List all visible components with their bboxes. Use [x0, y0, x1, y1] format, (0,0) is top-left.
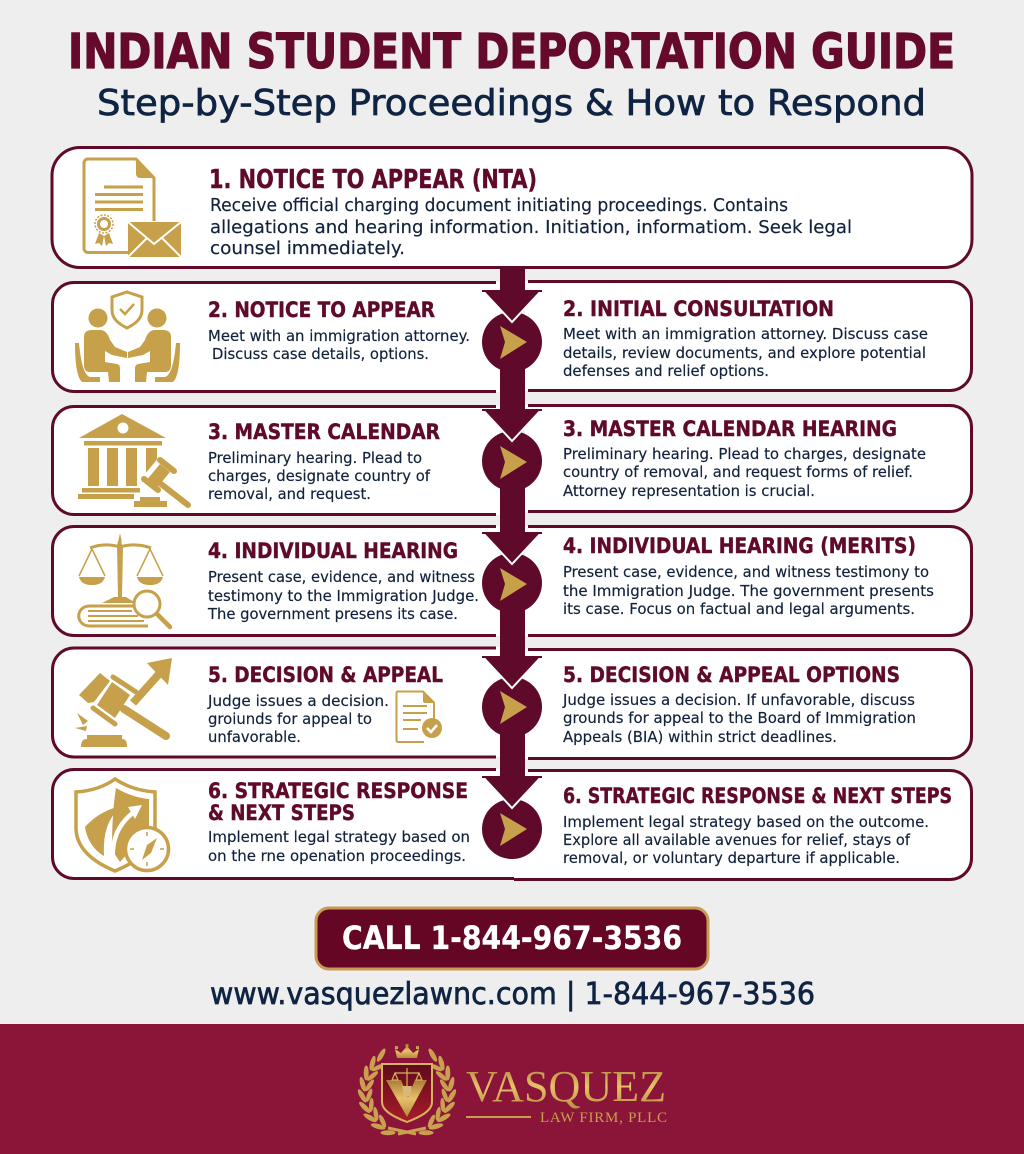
text block: Judge issues a decision.	[207, 692, 389, 710]
text block: on the rne openation proceedings.	[208, 847, 466, 865]
text block: Appeals (BIA) within strict deadlines.	[563, 728, 837, 746]
text block: Discuss case details, options.	[212, 345, 429, 363]
panel: step 2 right	[525, 281, 972, 391]
text block: Attorney representation is crucial.	[563, 482, 815, 500]
heading: 5. DECISION & APPEAL	[208, 663, 443, 688]
text block	[208, 327, 470, 363]
icon: document with seal and envelope	[84, 159, 181, 257]
text block: Explore all available avenues for relief, stays of	[563, 831, 911, 849]
text block: removal, and request.	[208, 485, 371, 503]
wordmark: VASQUEZ	[466, 1062, 666, 1111]
text block: Judge issues a decision. If unfavorable, discuss	[562, 691, 915, 709]
contact line: www.vasquezlawnc.com | 1-844-967-3536	[210, 977, 815, 1012]
icon: shield with road and compass	[76, 779, 170, 872]
step marker 4	[482, 532, 542, 613]
text block: Meet with an immigration attorney. Discuss case	[563, 325, 928, 343]
text block	[207, 692, 389, 746]
panel: step 6 right	[514, 770, 972, 880]
text block: The government presens its case.	[207, 605, 458, 623]
text block	[563, 445, 926, 500]
step marker 3	[482, 409, 542, 491]
step marker 2	[482, 290, 542, 372]
text block: unfavorable.	[208, 728, 301, 746]
icon: scales, book and magnifier	[79, 533, 170, 627]
panel: step 1 notice to appear	[52, 148, 972, 268]
icon: laurel wreath	[356, 1047, 458, 1135]
heading: 1. NOTICE TO APPEAR (NTA)	[209, 165, 537, 195]
step marker 5	[482, 656, 542, 737]
text block	[562, 691, 916, 746]
text block	[563, 325, 928, 380]
icon: two people meeting with shield	[75, 292, 180, 382]
panel: step 6 left	[52, 769, 515, 879]
step marker 6	[482, 776, 542, 859]
divider	[466, 1116, 531, 1118]
panel: step 4 left	[52, 526, 500, 636]
text block	[208, 449, 431, 503]
call button: CALL 1-844-967-3536	[342, 919, 682, 957]
panel: step 5 right	[525, 649, 972, 759]
call button	[316, 908, 708, 969]
icon: courthouse and gavel	[78, 414, 188, 507]
firm suffix: LAW FIRM, PLLC	[540, 1110, 667, 1126]
icon: crown	[395, 1044, 419, 1058]
text block: Present case, evidence, and witness testimony to	[563, 563, 929, 581]
heading: 3. MASTER CALENDAR HEARING	[563, 417, 897, 442]
text block: Present case, evidence, and witness	[208, 568, 475, 586]
text block: charges, designate country of	[208, 467, 431, 485]
heading: 3. MASTER CALENDAR	[208, 420, 440, 445]
text block: Preliminary hearing. Plead to charges, designate	[563, 445, 926, 463]
heading: 4. INDIVIDUAL HEARING (MERITS)	[563, 534, 916, 559]
text block: Receive official charging document initiating proceedings. Contains	[210, 195, 788, 216]
text block	[208, 828, 470, 865]
subtitle: Step-by-Step Proceedings & How to Respond	[97, 83, 926, 124]
text block: testimony to the Immigration Judge.	[208, 587, 479, 605]
heading	[208, 779, 468, 826]
icon: shield with V	[382, 1064, 432, 1122]
heading: 2. INITIAL CONSULTATION	[563, 297, 834, 322]
text block: removal, or voluntary departure if applicable.	[563, 849, 900, 867]
panel: step 4 right	[525, 526, 972, 636]
icon: gavel with rising arrow	[75, 658, 172, 747]
panel: step 5 left	[52, 647, 500, 757]
heading: & NEXT STEPS	[208, 801, 355, 826]
panel: step 2 left	[52, 282, 500, 392]
text block: its case. Focus on factual and legal arguments.	[563, 600, 915, 618]
footer band	[0, 1024, 1024, 1154]
text block: grounds for appeal to the Board of Immigration	[563, 709, 916, 727]
text block: defenses and relief options.	[563, 362, 769, 380]
text block	[563, 813, 929, 867]
heading: 4. INDIVIDUAL HEARING	[208, 539, 458, 564]
heading: 6. STRATEGIC RESPONSE	[208, 779, 468, 804]
text block: groiunds for appeal to	[208, 710, 372, 728]
text block: country of removal, and request forms of relief.	[563, 463, 913, 481]
text block: counsel immediately.	[210, 238, 405, 259]
icon: document with check	[396, 692, 442, 742]
text block: Implement legal strategy based on the outcome.	[563, 813, 929, 831]
text block	[563, 563, 934, 618]
logo	[356, 1044, 667, 1135]
text block: Implement legal strategy based on	[208, 828, 470, 846]
heading: 2. NOTICE TO APPEAR	[208, 298, 435, 323]
text block	[210, 195, 852, 259]
text block: Meet with an immigration attorney.	[208, 327, 470, 345]
text block: allegations and hearing information. Initiation, informatiom. Seek legal	[210, 217, 852, 238]
central timeline arrows	[482, 268, 542, 859]
panel: step 3 left	[52, 406, 500, 515]
panel: step 3 right	[525, 405, 972, 512]
text block: details, review documents, and explore potential	[563, 344, 926, 362]
heading: 5. DECISION & APPEAL OPTIONS	[563, 663, 900, 688]
text block: Preliminary hearing. Plead to	[208, 449, 422, 467]
text block: the Immigration Judge. The government presents	[563, 582, 934, 600]
text block	[207, 568, 479, 623]
